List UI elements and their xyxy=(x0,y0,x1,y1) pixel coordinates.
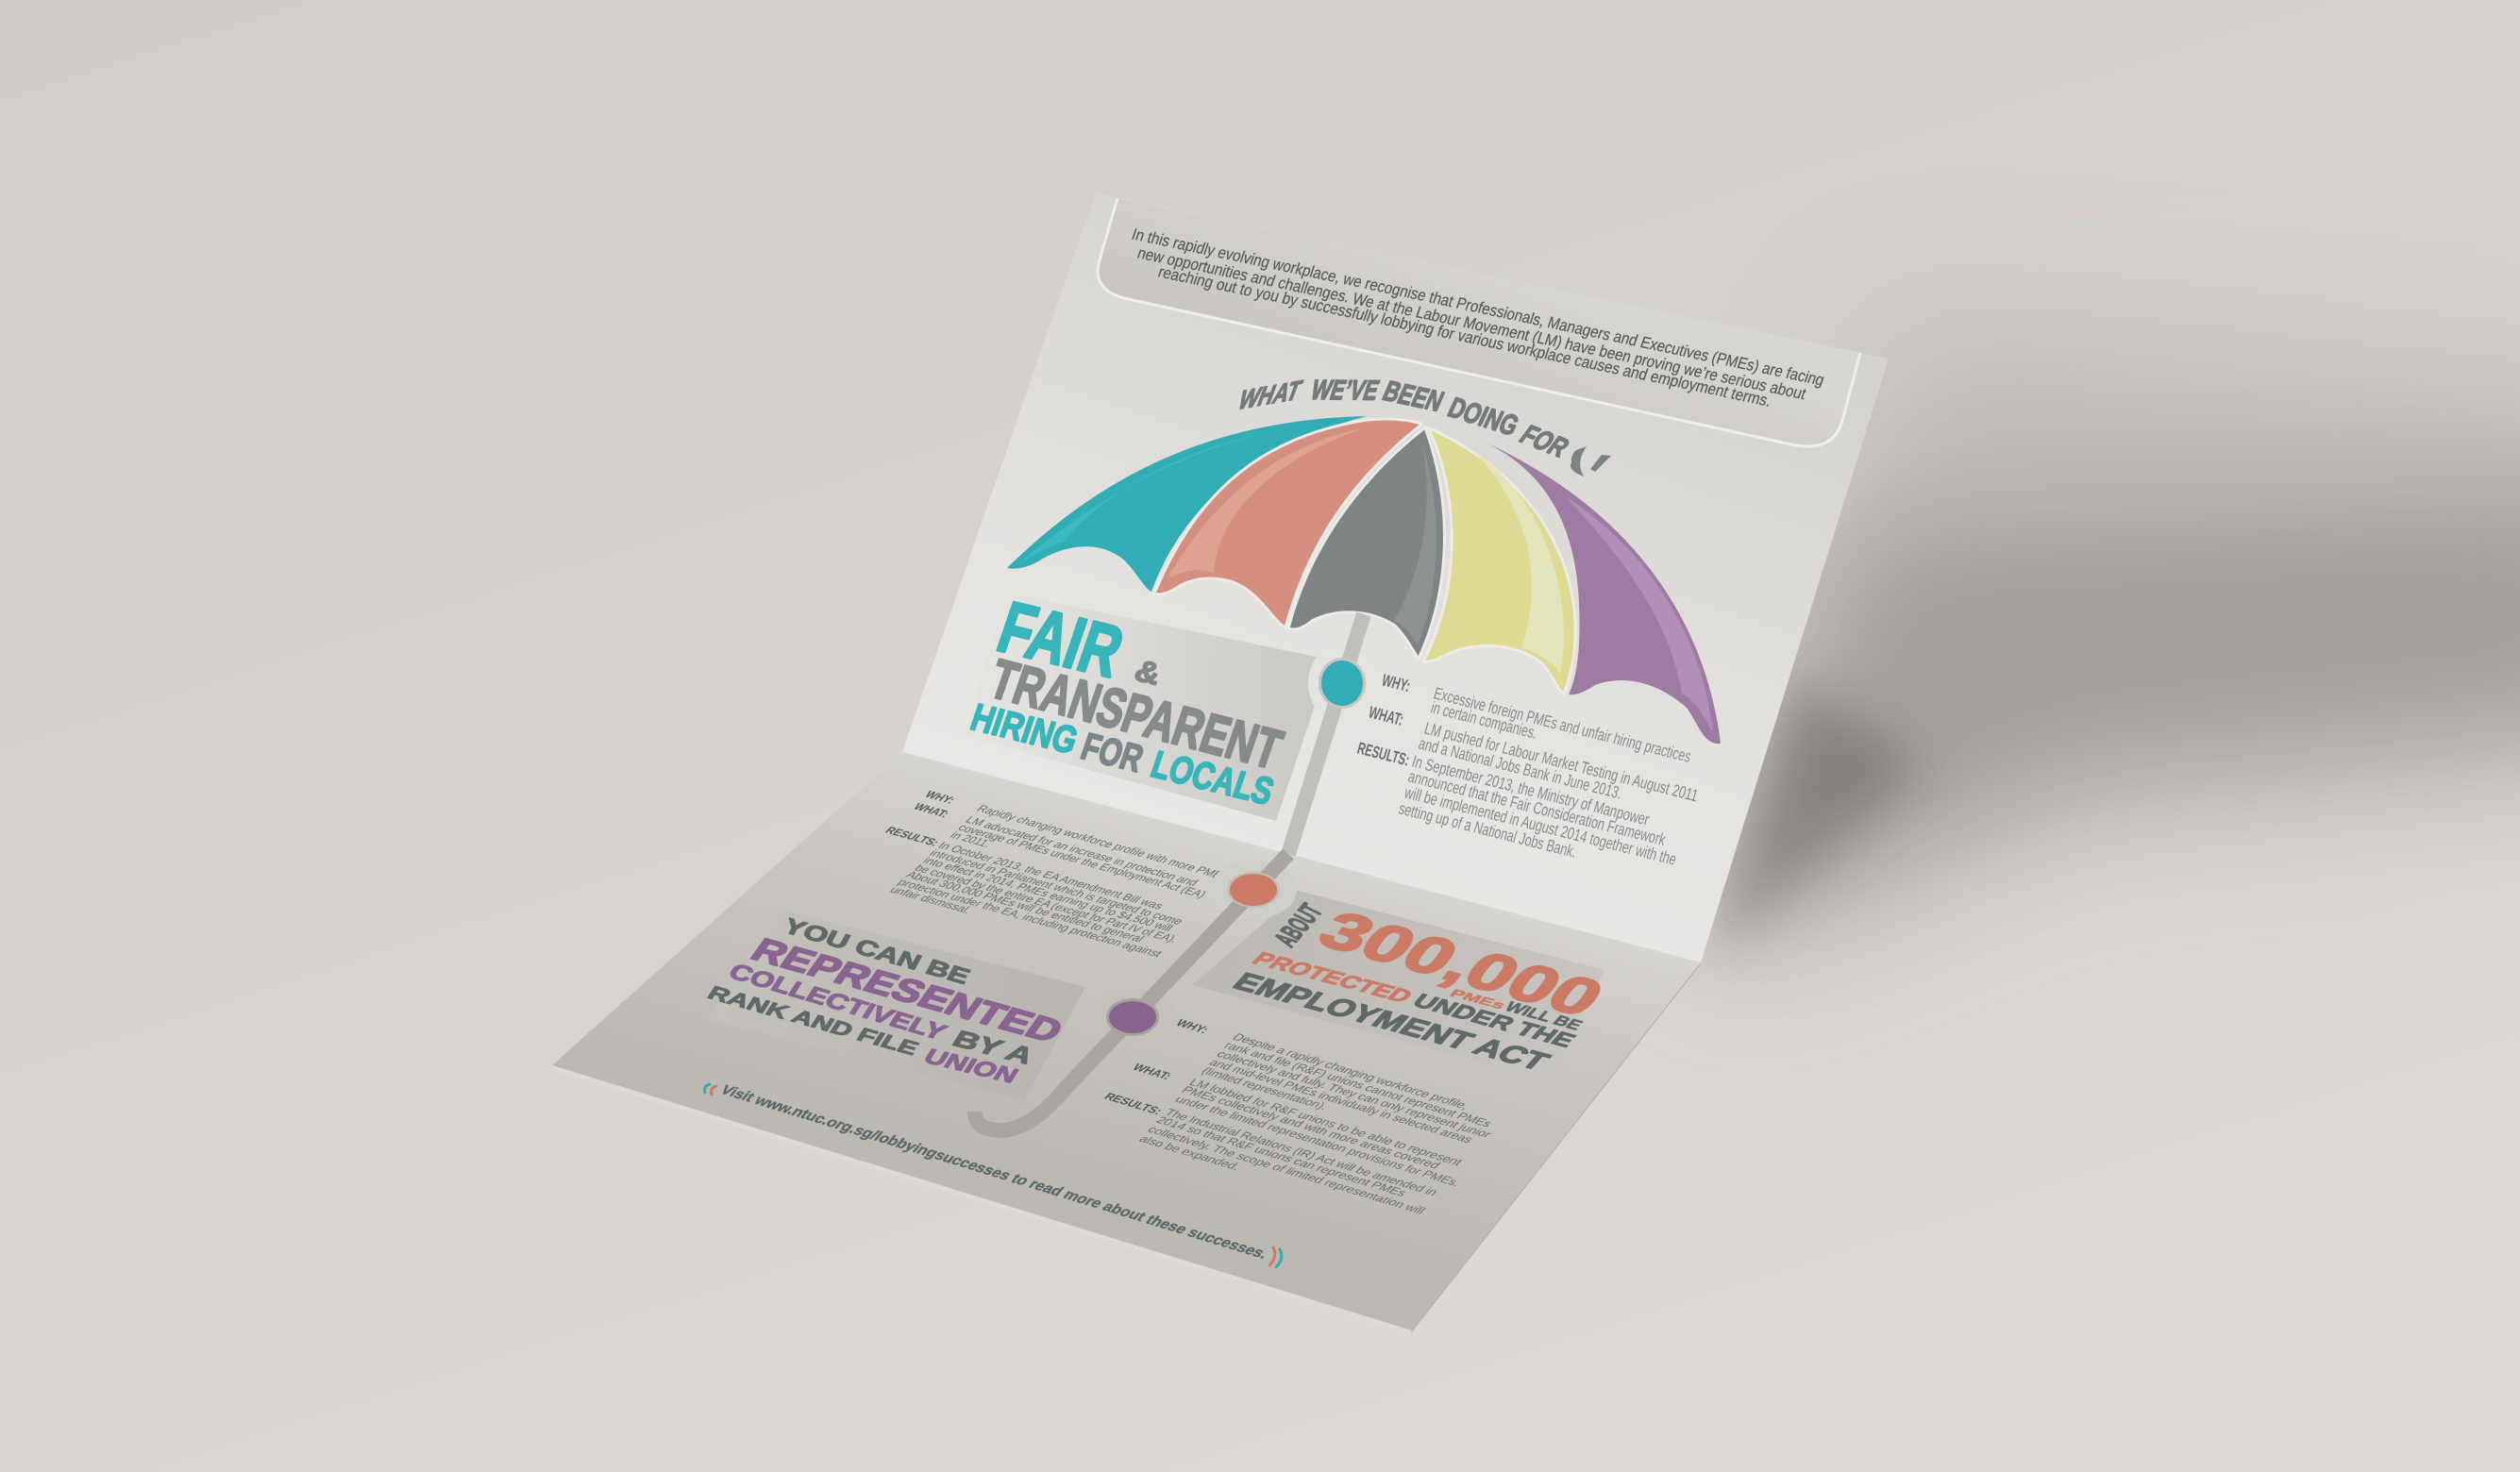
text block: representation why/what/results: RESULTS: xyxy=(1101,1091,1165,1117)
text block: fair hiring why/what/results: LM pushed for Labour Market Testing in August 2011 xyxy=(1422,719,1701,805)
text block: employment act why/what/results: In October 2013, the EA Amendment Bill was xyxy=(935,840,1167,912)
title: ampersand: & xyxy=(1131,653,1166,692)
icon: closing brackets xyxy=(1269,1247,1282,1267)
text block: fair hiring why/what/results: WHAT: xyxy=(1367,703,1405,729)
visit text: Visit www.ntuc.org.sg/lobbyingsuccesses to read more about these successes. xyxy=(717,1082,1272,1262)
title: hiring for locals: LOCALS xyxy=(1146,743,1279,813)
intro text: reaching out to you by successfully lobbying for various workplace causes and employment terms. xyxy=(1156,262,1774,410)
label: employment act: EMPLOYMENT ACT xyxy=(1226,968,1555,1076)
text block: representation why/what/results: PMEs collectively and with more areas covered xyxy=(1179,1084,1443,1171)
text block: fair hiring why/what/results xyxy=(1355,671,1701,869)
text block: fair hiring why/what/results: In September 2013, the Ministry of Manpower xyxy=(1410,752,1652,829)
panel: lower page xyxy=(552,752,1701,1334)
text block: employment act why/what/results: into effect in 2014. PMEs earning up to $4,500 will xyxy=(920,855,1175,933)
text block: fair hiring why/what/results: and a National Jobs Bank in June 2013. xyxy=(1417,734,1624,803)
purple handle marker xyxy=(1106,998,1159,1036)
heading: what we've been doing for: DOING xyxy=(1443,392,1523,442)
panel: intro flap xyxy=(1098,198,1860,446)
title: hiring for locals: HIRING xyxy=(966,695,1084,762)
chart: umbrella handle xyxy=(975,614,1364,1130)
salmon handle marker xyxy=(1227,872,1280,908)
canopy panel: yellow xyxy=(1423,427,1575,694)
text block: fair hiring why/what/results: RESULTS: xyxy=(1355,739,1412,769)
panel: you can be represented callout xyxy=(703,911,1176,1101)
text block: representation why/what/results: and mid-level PMEs individually in selected areas xyxy=(1206,1057,1476,1146)
stat: 300,000: 300,000 xyxy=(1306,900,1617,1028)
teal handle marker xyxy=(1319,658,1366,709)
title: rank and file: RANK AND FILE xyxy=(703,982,923,1060)
intro text: In this rapidly evolving workplace, we recognise that Professionals, Managers and Executives (PMEs) are facing xyxy=(1130,225,1827,389)
label: about: ABOUT xyxy=(1268,899,1330,951)
text block: employment act why/what/results: protection under the EA, including protection against xyxy=(895,877,1165,960)
text block: employment act why/what/results: be covered by the entire EA (except for Part IV of EA). xyxy=(912,862,1181,945)
heading: what we've been doing for: BEEN xyxy=(1378,375,1449,417)
footer: visit link xyxy=(705,1082,1282,1267)
label: PMEs: PMEs xyxy=(1447,987,1508,1012)
panel: fair and transparent title xyxy=(965,587,1376,821)
text block: employment act why/what/results: in 2011. xyxy=(948,829,994,849)
text block: employment act why/what/results: introduced in Parliament which is targeted to come xyxy=(927,847,1185,928)
title: represented: REPRESENTED xyxy=(744,931,1070,1049)
text block: representation why/what/results: 2014 so that R&F unions can represent PMEs xyxy=(1153,1114,1409,1199)
text block: representation why/what/results: rank and file (R&F) unions cannot represent PMEs xyxy=(1221,1040,1494,1129)
label: under the: UNDER THE xyxy=(1407,990,1581,1051)
label: will be: WILL BE xyxy=(1501,998,1587,1033)
text block: representation why/what/results: also be expanded. xyxy=(1136,1133,1243,1173)
text block: representation why/what/results: under the limited representation provisions for PMEs. xyxy=(1172,1094,1463,1189)
heading: what we've been doing for xyxy=(1235,374,1575,462)
text block: employment act why/what/results: unfair dismissal. xyxy=(887,884,974,916)
text block: fair hiring why/what/results: will be implemented in August 2014 together with the xyxy=(1402,783,1679,869)
title: hiring for locals: FOR xyxy=(1076,725,1149,780)
icon: U logo mark xyxy=(1571,446,1611,477)
canopy panel: gray xyxy=(1288,427,1444,659)
intro text xyxy=(1130,225,1827,410)
text block: employment act why/what/results: LM advocated for an increase in protection and xyxy=(963,814,1201,888)
text block: fair hiring why/what/results: setting up of a National Jobs Bank. xyxy=(1397,799,1579,861)
intro text: new opportunities and challenges. We at the Labour Movement (LM) have been proving we’re serious about xyxy=(1135,243,1809,403)
text block: employment act why/what/results: coverage of PMEs under the Employment Act (EA) xyxy=(955,822,1209,900)
title: hiring for locals xyxy=(966,695,1279,813)
panel: upper page xyxy=(902,192,1889,962)
cast shadow of raised page xyxy=(1699,311,2520,962)
canopy panel: salmon xyxy=(1154,419,1421,627)
title: you can be: YOU CAN BE xyxy=(779,913,975,989)
title: by a: BY A xyxy=(948,1026,1039,1069)
text block: representation why/what/results: collectively. The scope of limited representation will xyxy=(1145,1124,1428,1216)
text block: representation why/what/results xyxy=(1101,1017,1494,1216)
text block: employment act why/what/results: WHAT: xyxy=(911,801,951,820)
text block: fair hiring why/what/results: announced that the Fair Consideration Framework xyxy=(1406,767,1668,849)
heading: what we've been doing for: WHAT xyxy=(1235,375,1306,416)
text block: employment act why/what/results xyxy=(882,789,1234,960)
canopy panel: purple xyxy=(1484,442,1721,744)
text block: representation why/what/results: collectively and fully. They can only represent junior xyxy=(1214,1048,1494,1140)
text block: fair hiring why/what/results: Excessive foreign PMEs and unfair hiring practices xyxy=(1432,684,1693,766)
text block: representation why/what/results: WHY: xyxy=(1173,1017,1211,1036)
icon: opening brackets xyxy=(705,1084,716,1095)
text block: employment act why/what/results: Rapidly changing workforce profile with more PMEs. xyxy=(974,803,1234,883)
heading: what we've been doing for: FOR xyxy=(1514,420,1575,462)
text block: employment act why/what/results: About 300,000 PMEs will be entitled to general xyxy=(903,869,1147,945)
text block: representation why/what/results: (limited representation). xyxy=(1199,1065,1331,1112)
label: protected: PROTECTED xyxy=(1247,949,1418,1007)
text block: fair hiring why/what/results: WHY: xyxy=(1380,671,1413,695)
text block: employment act why/what/results: RESULTS: xyxy=(882,825,941,848)
title: collectively: COLLECTIVELY xyxy=(724,959,951,1045)
text block: representation why/what/results: Despite a rapidly changing workforce profile, xyxy=(1230,1031,1472,1112)
title: TRANSPARENT: TRANSPARENT xyxy=(983,648,1289,781)
heading: what we've been doing for: WE’VE xyxy=(1307,374,1383,406)
panel: 300,000 callout xyxy=(1192,861,1617,1080)
illustration: umbrella canopy xyxy=(1007,416,1721,744)
text block: representation why/what/results: WHAT: xyxy=(1130,1062,1174,1082)
text block: fair hiring why/what/results: in certain companies. xyxy=(1429,698,1539,743)
canopy panel: teal xyxy=(1007,416,1367,592)
title: union: UNION xyxy=(919,1045,1023,1088)
text block: representation why/what/results: LM lobbied for R&F unions to be able to represent xyxy=(1186,1077,1466,1168)
text block: employment act why/what/results: WHY: xyxy=(922,789,957,806)
text block: representation why/what/results: The Industrial Relations (IR) Act will be amended in xyxy=(1162,1107,1440,1198)
title: FAIR: FAIR xyxy=(988,587,1133,693)
